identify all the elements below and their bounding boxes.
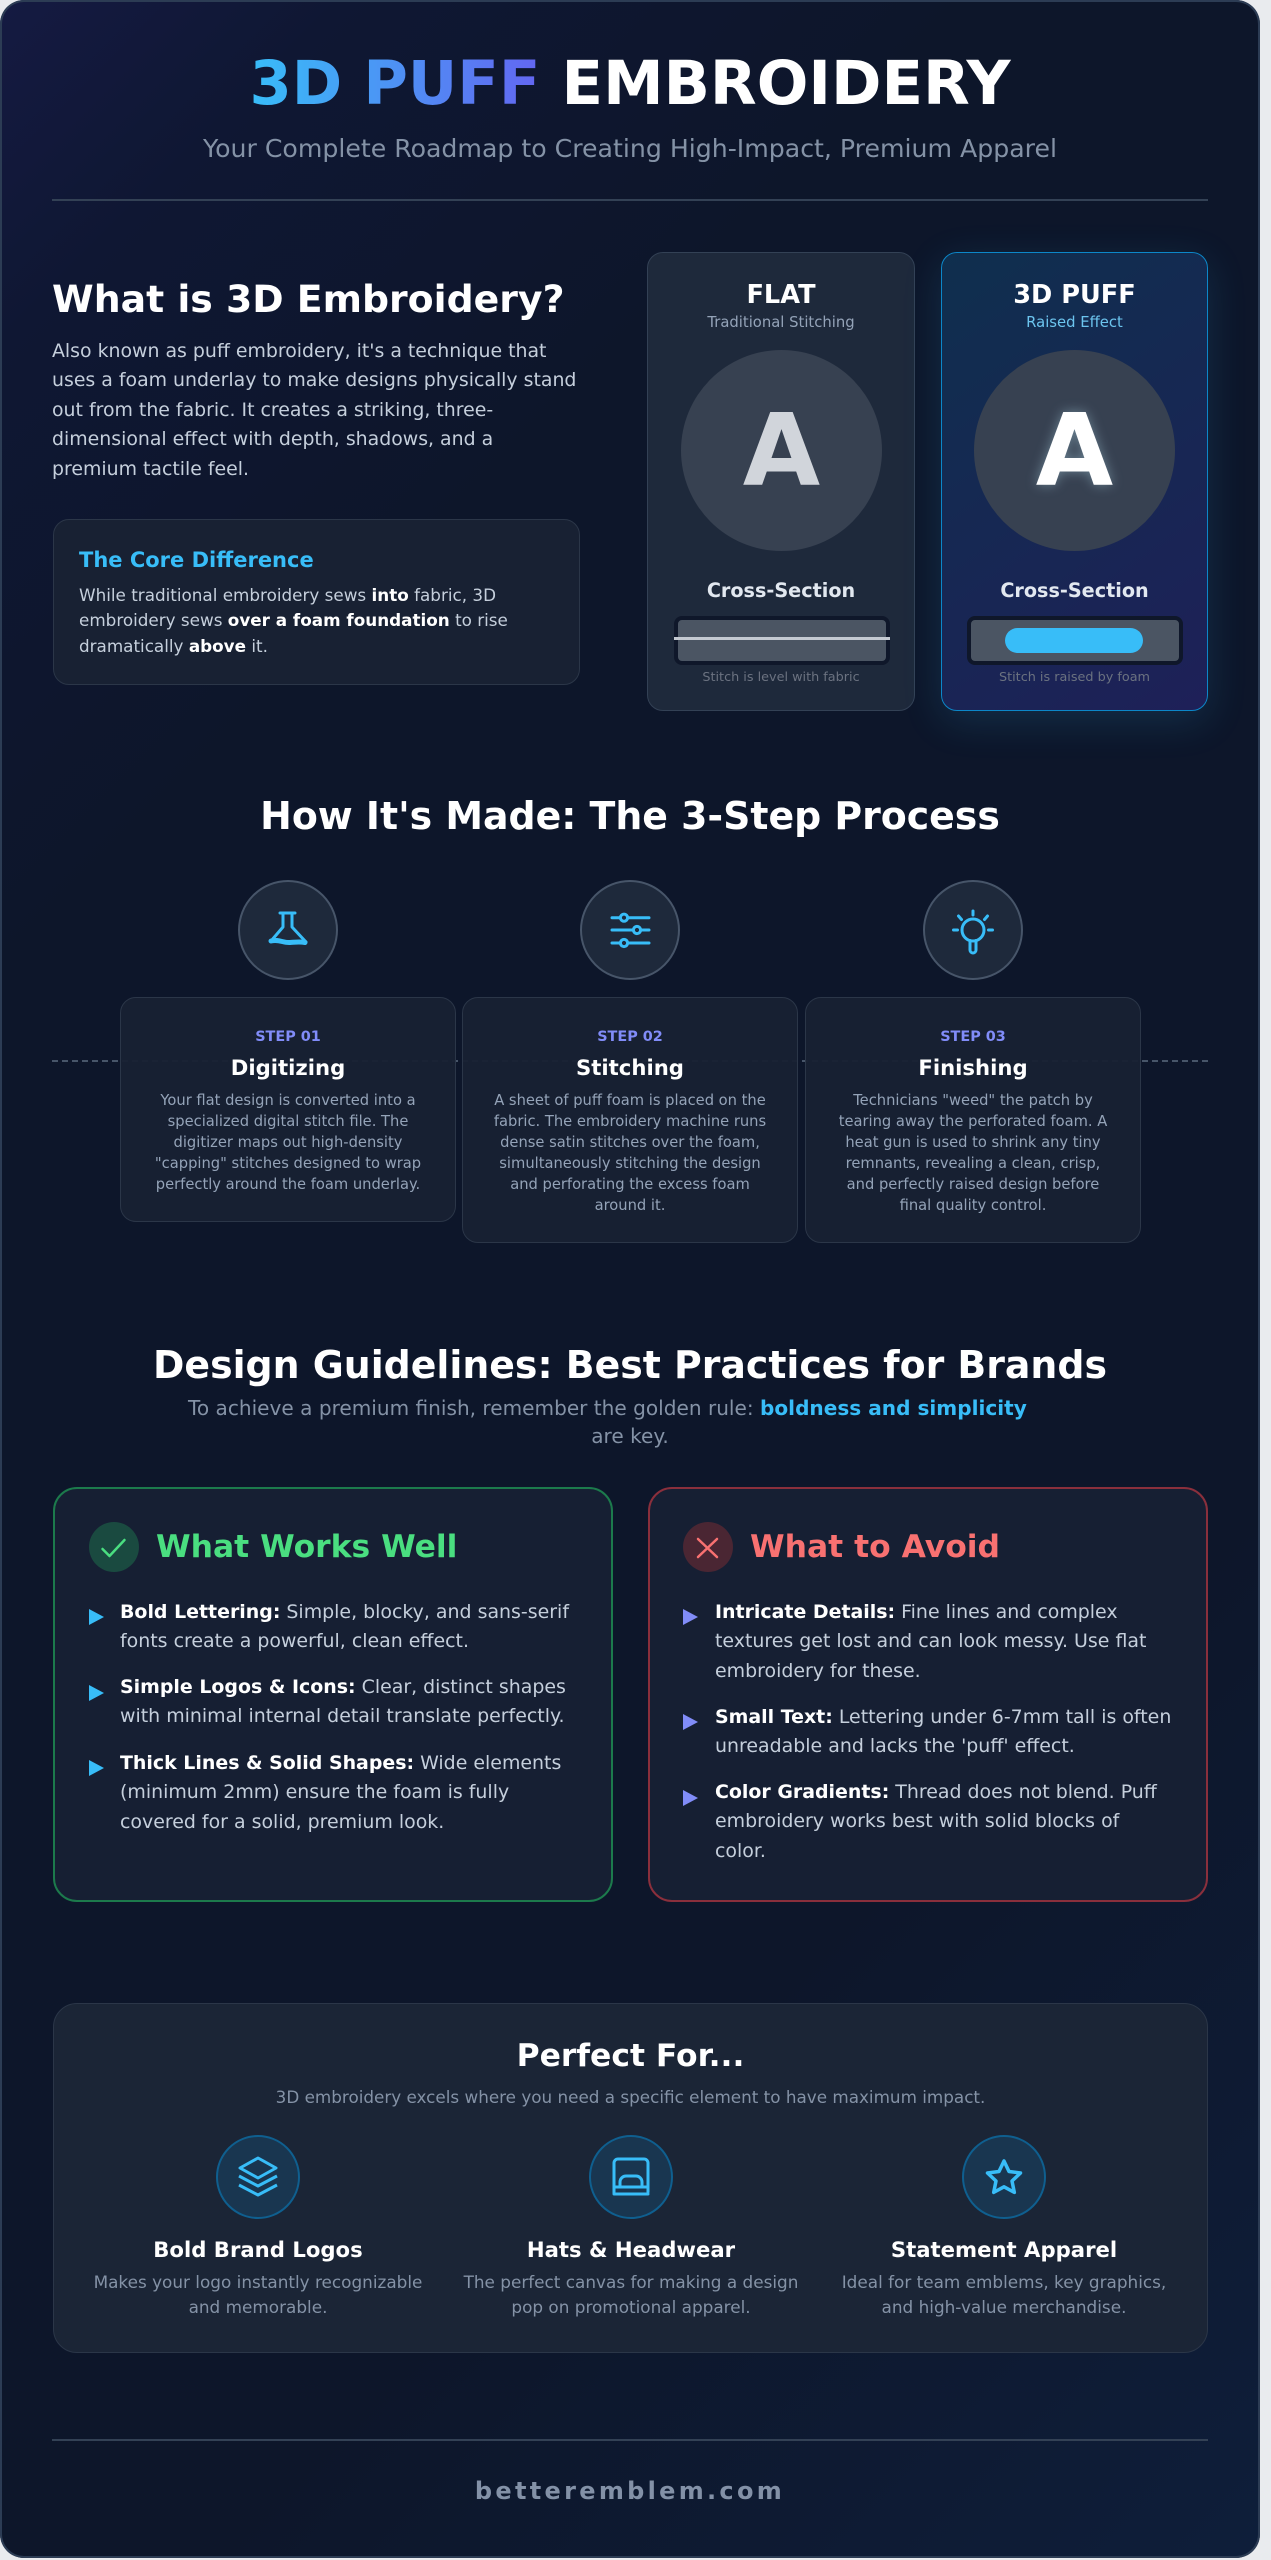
letter sample: puff A (974, 350, 1175, 551)
item: thick lines: Thick Lines & Solid Shapes: Wide elements (120, 1752, 561, 1774)
use case: brand logos (94, 2135, 422, 2317)
icon: layers (216, 2135, 300, 2219)
cross-section diagram: flat (674, 616, 890, 665)
item: thick lines: covered for a solid, premium look. (120, 1811, 444, 1833)
step description: simultaneously stitching the design (499, 1155, 761, 1172)
step description: A sheet of puff foam is placed on the (494, 1092, 766, 1109)
step 2: stitching (462, 880, 798, 1243)
step description (839, 1092, 1108, 1214)
intro line two: are key. (591, 1424, 669, 1448)
bullet list: works well (89, 1601, 570, 1833)
callout text: dramatically above it. (79, 636, 268, 656)
card heading: What Works Well (156, 1529, 457, 1565)
cross-section label: Cross-Section (1000, 579, 1149, 602)
bullet list: avoid (683, 1601, 1171, 1862)
item: simple logos: Simple Logos & Icons: Clear, distinct shapes (120, 1676, 566, 1698)
item: thick lines (120, 1752, 561, 1833)
use case text: Ideal for team emblems, key graphics, (842, 2272, 1166, 2292)
letter sample: flat A (681, 350, 882, 551)
icon: check mark (89, 1522, 139, 1572)
card title: 3D puff: 3D PUFF (1013, 280, 1136, 310)
title: 3D PUFF EMBROIDERY (249, 49, 1011, 119)
letter sample: puff A: A (1036, 392, 1113, 509)
step description (155, 1092, 421, 1193)
step description (494, 1092, 766, 1214)
step card (120, 997, 456, 1222)
use case text: The perfect canvas for making a design (464, 2272, 798, 2292)
item: small text (715, 1706, 1171, 1757)
panel: what to avoid (648, 1487, 1208, 1902)
step description: fabric. The embroidery machine runs (494, 1113, 766, 1130)
callout heading: The Core Difference (79, 548, 314, 572)
item: thick lines: (minimum 2mm) ensure the foam is fully (120, 1781, 509, 1803)
cross-section label: Cross-Section (707, 579, 855, 602)
item: simple logos (120, 1676, 566, 1727)
item: bold lettering: Bold Lettering: Simple, blocky, and sans-serif (120, 1601, 569, 1623)
panel: perfect for (53, 2003, 1208, 2353)
item: small text: Small Text: Lettering under 6-7mm tall is often (715, 1706, 1171, 1728)
step description: and perforating the excess foam (510, 1176, 750, 1193)
item: intricate details: Intricate Details: Fine lines and complex (715, 1601, 1118, 1623)
item: color gradients: color. (715, 1840, 766, 1862)
intro line one: To achieve a premium finish, remember the golden rule: boldness and simplicity (188, 1396, 1027, 1420)
item: simple logos: with minimal internal detail translate perfectly. (120, 1705, 564, 1727)
step title: Stitching (576, 1055, 684, 1080)
step number: STEP 03 (940, 1029, 1006, 1045)
use case title: Hats & Headwear (527, 2237, 735, 2262)
item: color gradients: embroidery works best with solid blocks of (715, 1810, 1119, 1832)
step description: perfectly around the foam underlay. (156, 1176, 420, 1193)
foam pill (1005, 628, 1143, 653)
intro paragraph: premium tactile feel. (52, 458, 249, 480)
bullet marker (683, 1609, 698, 1625)
intro paragraph: Also known as puff embroidery, it's a technique that (52, 340, 546, 362)
bullet marker (89, 1685, 104, 1701)
item: intricate details (715, 1601, 1146, 1682)
use case text: and high-value merchandise. (882, 2297, 1126, 2317)
use case text (94, 2272, 422, 2317)
intro paragraph: uses a foam underlay to make designs physically stand (52, 369, 576, 391)
use case text (842, 2272, 1166, 2317)
panel: 3D puff card (941, 252, 1208, 711)
card subtitle: flat: Traditional Stitching (707, 314, 855, 331)
callout text: embroidery sews over a foam foundation to rise (79, 610, 508, 630)
step description: tearing away the perforated foam. A (839, 1113, 1107, 1130)
step description: digitizer maps out high-density (174, 1134, 402, 1151)
card heading: What to Avoid (750, 1529, 1000, 1565)
step 3: finishing (805, 880, 1141, 1243)
heading: what is 3D embroidery: What is 3D Embroidery? (52, 277, 564, 321)
intro paragraph: out from the fabric. It creates a striking, three- (52, 399, 493, 421)
callout: the core difference (53, 519, 580, 685)
step description: Your flat design is converted into a (160, 1092, 416, 1109)
card title: flat: FLAT (746, 280, 816, 310)
callout text: While traditional embroidery sews into fabric, 3D (79, 585, 496, 605)
step description: "capping" stitches designed to wrap (155, 1155, 421, 1172)
step title: Digitizing (231, 1055, 345, 1080)
step description: and perfectly raised design before (847, 1176, 1099, 1193)
use case text (464, 2272, 798, 2317)
use case title: Bold Brand Logos (153, 2237, 363, 2262)
step description: around it. (595, 1197, 665, 1214)
use case text: Makes your logo instantly recognizable (94, 2272, 422, 2292)
item: bold lettering (120, 1601, 570, 1652)
step number: STEP 01 (255, 1029, 321, 1045)
icon: cross mark (683, 1522, 733, 1572)
step description: remnants, revealing a clean, crisp, (846, 1155, 1100, 1172)
panel intro: 3D embroidery excels where you need a specific element to have maximum impact. (276, 2087, 985, 2107)
bullet marker (683, 1790, 698, 1806)
item: intricate details: embroidery for these. (715, 1660, 921, 1682)
intro paragraph: dimensional effect with depth, shadows, and a (52, 428, 493, 450)
icon: light bulb (923, 880, 1023, 980)
item: small text: unreadable and lacks the 'puff' effect. (715, 1735, 1075, 1757)
step description: final quality control. (900, 1197, 1046, 1214)
panel heading: Perfect For... (517, 2038, 744, 2074)
step card (462, 997, 798, 1243)
item: color gradients: Color Gradients: Thread does not blend. Puff (715, 1781, 1157, 1803)
step 1: digitizing (120, 880, 456, 1222)
caption: puff: Stitch is raised by foam (999, 670, 1150, 685)
panel: what works well (53, 1487, 613, 1902)
stitch line (674, 637, 890, 640)
bullet marker (89, 1609, 104, 1625)
caption: flat: Stitch is level with fabric (702, 670, 860, 685)
intro paragraph (52, 340, 576, 480)
icon: star (962, 2135, 1046, 2219)
item: intricate details: textures get lost and can look messy. Use flat (715, 1630, 1146, 1652)
use case: apparel (842, 2135, 1166, 2317)
heading: how it's made: How It's Made: The 3-Step Process (260, 794, 1000, 838)
icon: flask (238, 880, 338, 980)
icon: cap (589, 2135, 673, 2219)
panel: what is 3D embroidery (52, 277, 580, 685)
item: bold lettering: fonts create a powerful, clean effect. (120, 1630, 469, 1652)
step description: heat gun is used to shrink any tiny (845, 1134, 1101, 1151)
heading: design guidelines: Design Guidelines: Best Practices for Brands (153, 1343, 1107, 1387)
item: color gradients (715, 1781, 1158, 1862)
card subtitle: 3D puff: Raised Effect (1026, 314, 1123, 331)
guidelines intro (188, 1396, 1027, 1448)
step description: specialized digital stitch file. The (168, 1113, 408, 1130)
step description: dense satin stitches over the foam, (500, 1134, 760, 1151)
bullet marker (89, 1760, 104, 1776)
bullet marker (683, 1714, 698, 1730)
panel: flat stitching card (647, 252, 915, 711)
use case text: and memorable. (189, 2297, 327, 2317)
use case title: Statement Apparel (891, 2237, 1117, 2262)
step number: STEP 02 (597, 1029, 663, 1045)
letter sample: flat A: A (743, 392, 820, 509)
use case text: pop on promotional apparel. (511, 2297, 751, 2317)
step title: Finishing (918, 1055, 1028, 1080)
step description: Technicians "weed" the patch by (853, 1092, 1093, 1109)
icon: sliders (580, 880, 680, 980)
cross-section diagram: puff (967, 616, 1183, 665)
callout text (79, 585, 508, 656)
use case: hats (464, 2135, 798, 2317)
step card (805, 997, 1141, 1243)
subtitle: Your Complete Roadmap to Creating High-Impact, Premium Apparel (203, 134, 1057, 163)
footer brand: betteremblem.com (475, 2477, 785, 2505)
